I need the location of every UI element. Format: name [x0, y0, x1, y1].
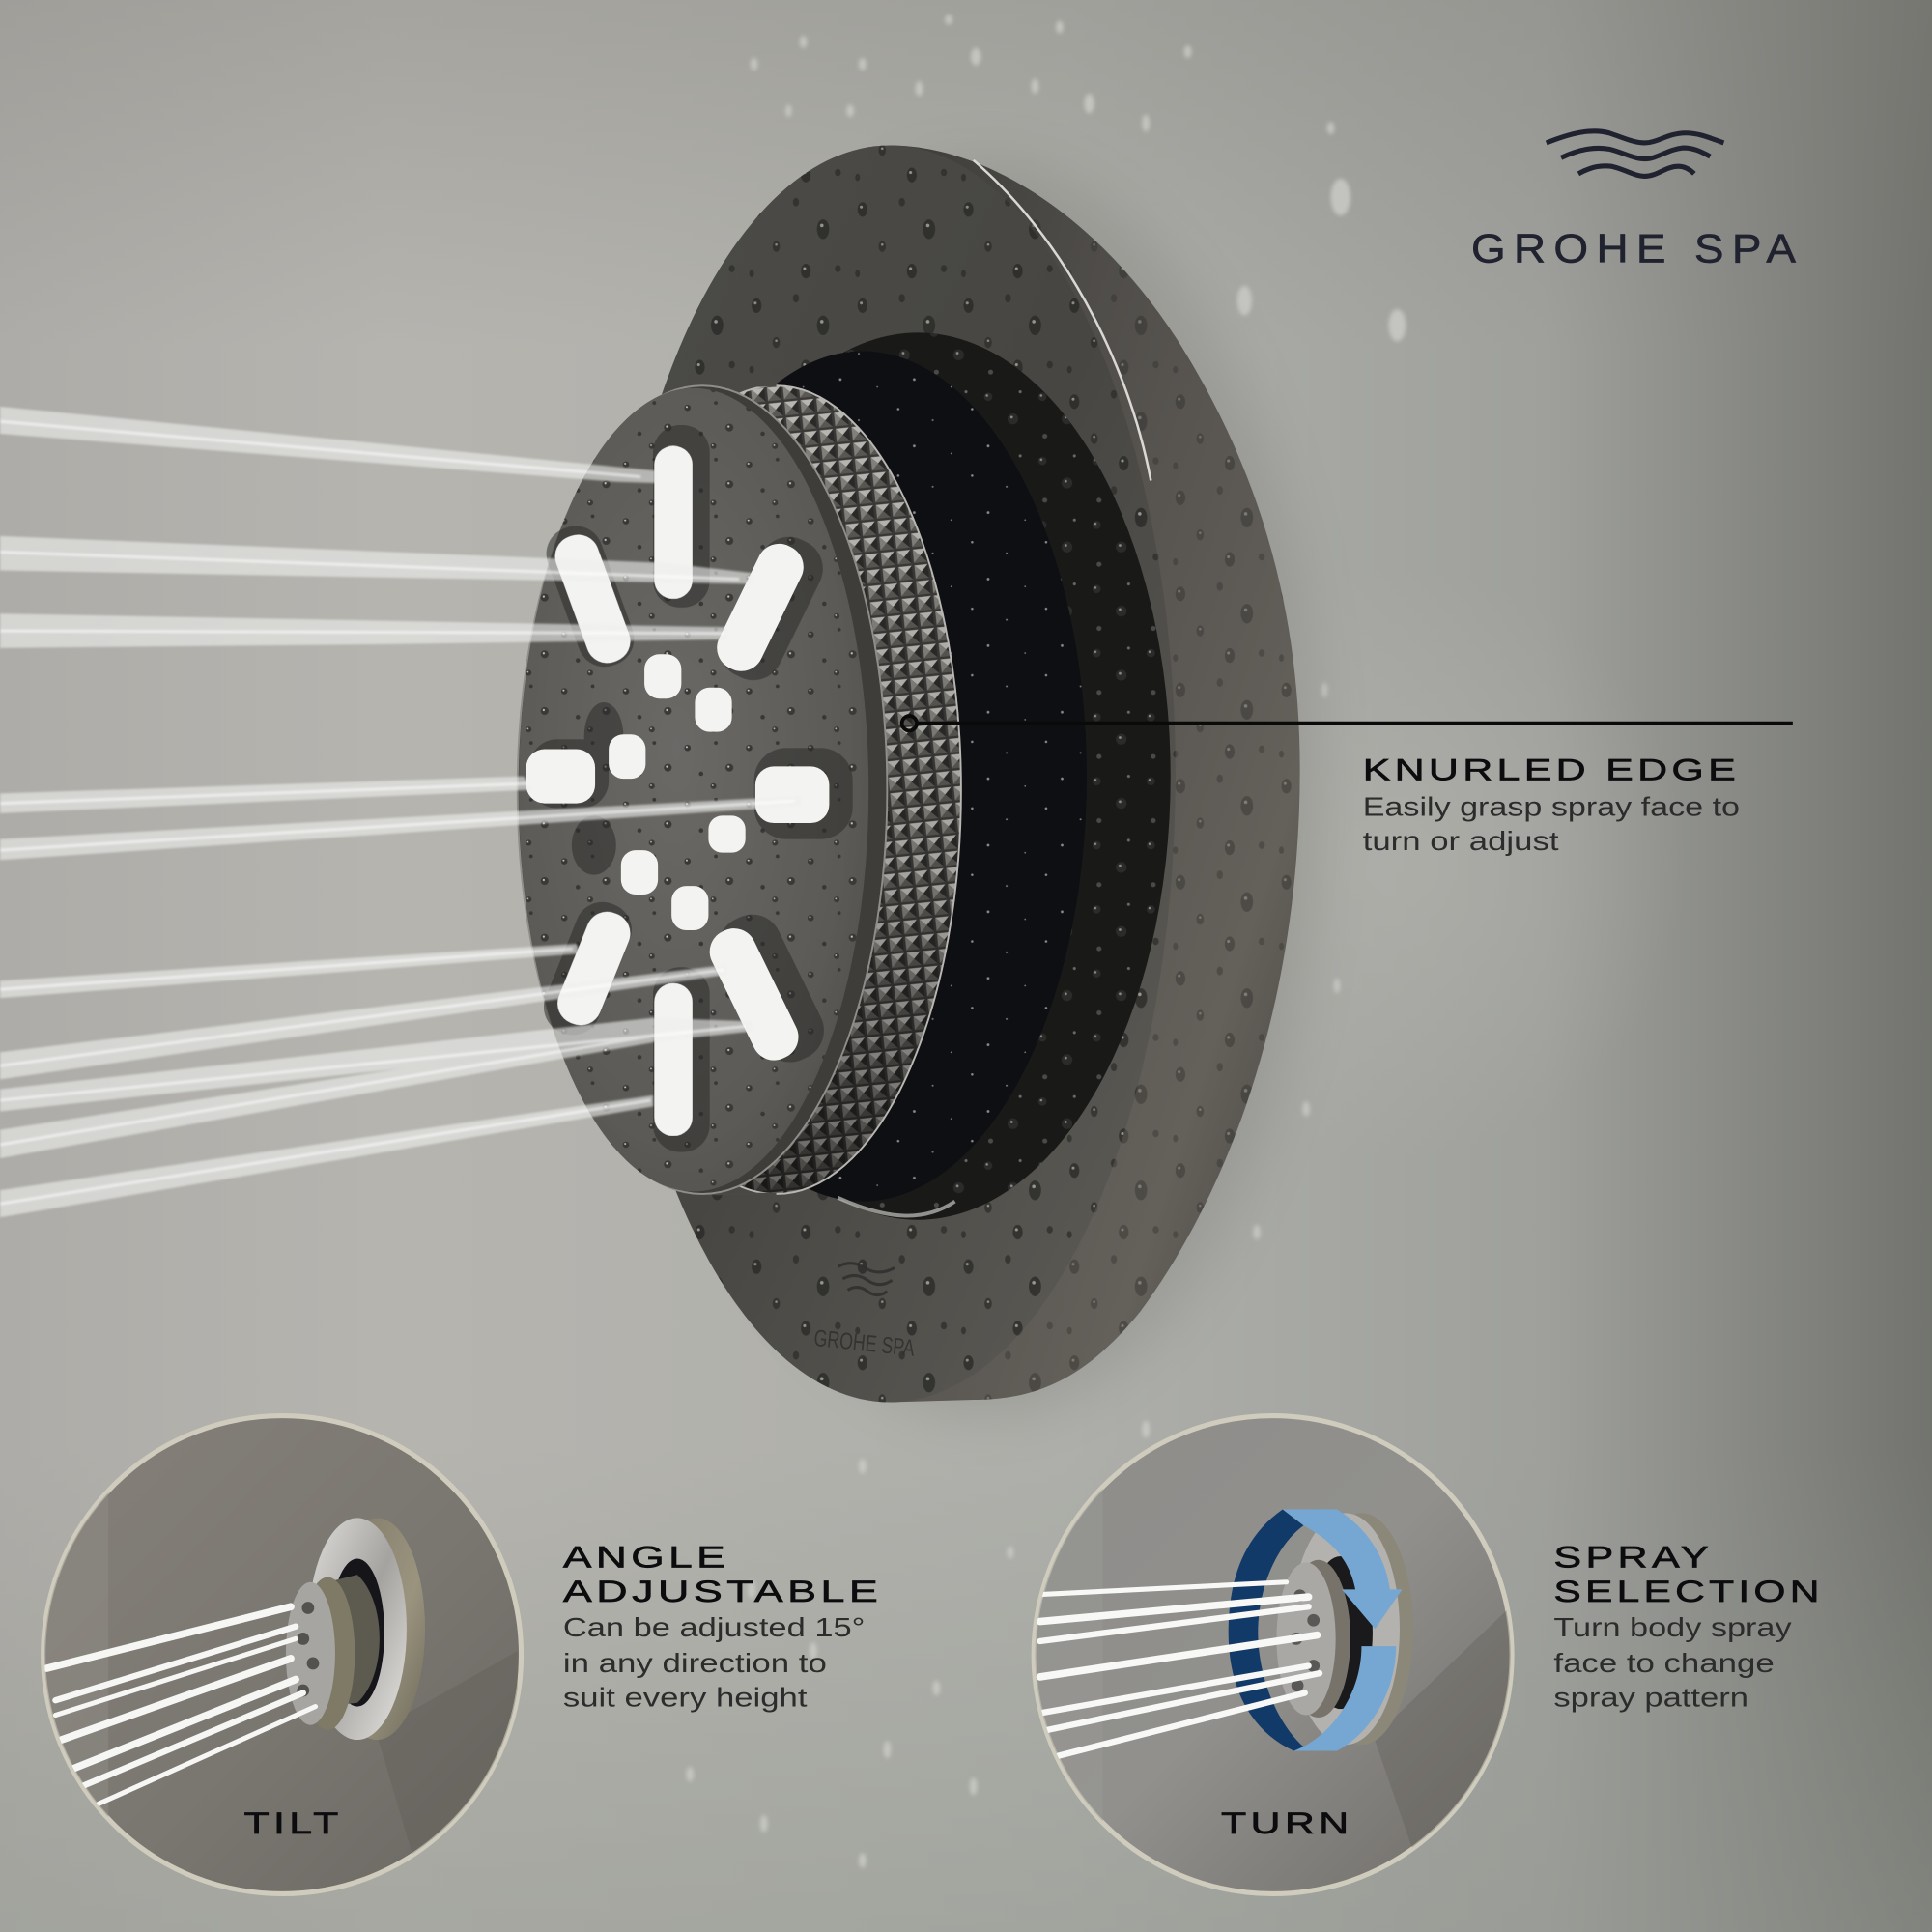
leader line: [902, 716, 1793, 730]
turn light arrow top: [1283, 1509, 1403, 1629]
flange opening: [666, 332, 1171, 1220]
angle adjustable heading: ADJUSTABLE: [563, 1574, 882, 1608]
turn head: [1276, 1560, 1350, 1718]
tilt flange: [308, 1518, 425, 1740]
flange front face: [604, 146, 1176, 1403]
embossed flange logo: GROHE SPA: [812, 1325, 917, 1362]
callout: knurled edge: [902, 716, 1793, 856]
callout: angle adjustable: [563, 1539, 882, 1713]
brand logo: [1471, 131, 1804, 271]
spray face: [518, 385, 887, 1194]
chrome flange: [662, 145, 1300, 1403]
spray selection heading: SELECTION: [1553, 1574, 1824, 1608]
panel: tilt: [37, 1405, 522, 1897]
spray head: [518, 385, 961, 1194]
turn label: TURN: [1221, 1805, 1353, 1840]
angle adjustable description: Can be adjusted 15°: [563, 1612, 865, 1642]
flange side wall: [890, 146, 1300, 1403]
knurled edge description: Easily grasp spray face to: [1363, 791, 1740, 821]
panel: turn: [1029, 1405, 1516, 1897]
angle adjustable description: suit every height: [563, 1683, 808, 1713]
tilt head: [286, 1577, 355, 1730]
turn jets: [1040, 1582, 1320, 1756]
brand name: GROHE SPA: [1471, 226, 1804, 271]
spray selection description: spray pattern: [1553, 1683, 1748, 1713]
water jets: [0, 407, 801, 1217]
tilt label: TILT: [244, 1805, 343, 1840]
spray selection description: face to change: [1553, 1648, 1775, 1678]
spray selection heading: SPRAY: [1553, 1539, 1713, 1574]
spray selection description: Turn body spray: [1553, 1612, 1792, 1642]
tilt jets: [46, 1606, 316, 1804]
knurled edge: [591, 385, 961, 1194]
embossed flange logo: [812, 1264, 917, 1362]
nozzle sockets: [529, 425, 853, 1152]
large white nozzles: [526, 446, 829, 1136]
turn flange: [1292, 1513, 1413, 1745]
flange shadow: [653, 160, 1319, 1417]
angle adjustable description: in any direction to: [563, 1648, 827, 1678]
turn light arrow bottom: [1293, 1646, 1396, 1750]
icon: waves: [1547, 131, 1723, 176]
small white nozzles: [609, 654, 746, 930]
knurled edge heading: KNURLED EDGE: [1363, 752, 1740, 786]
inner black disc: [639, 352, 1087, 1202]
water droplets on wall: [686, 14, 1406, 1868]
turn dark arrow segment: [1229, 1509, 1309, 1750]
angle adjustable heading: ANGLE: [563, 1539, 729, 1574]
callout: spray selection: [1553, 1539, 1824, 1713]
knurled edge description: turn or adjust: [1363, 826, 1559, 856]
